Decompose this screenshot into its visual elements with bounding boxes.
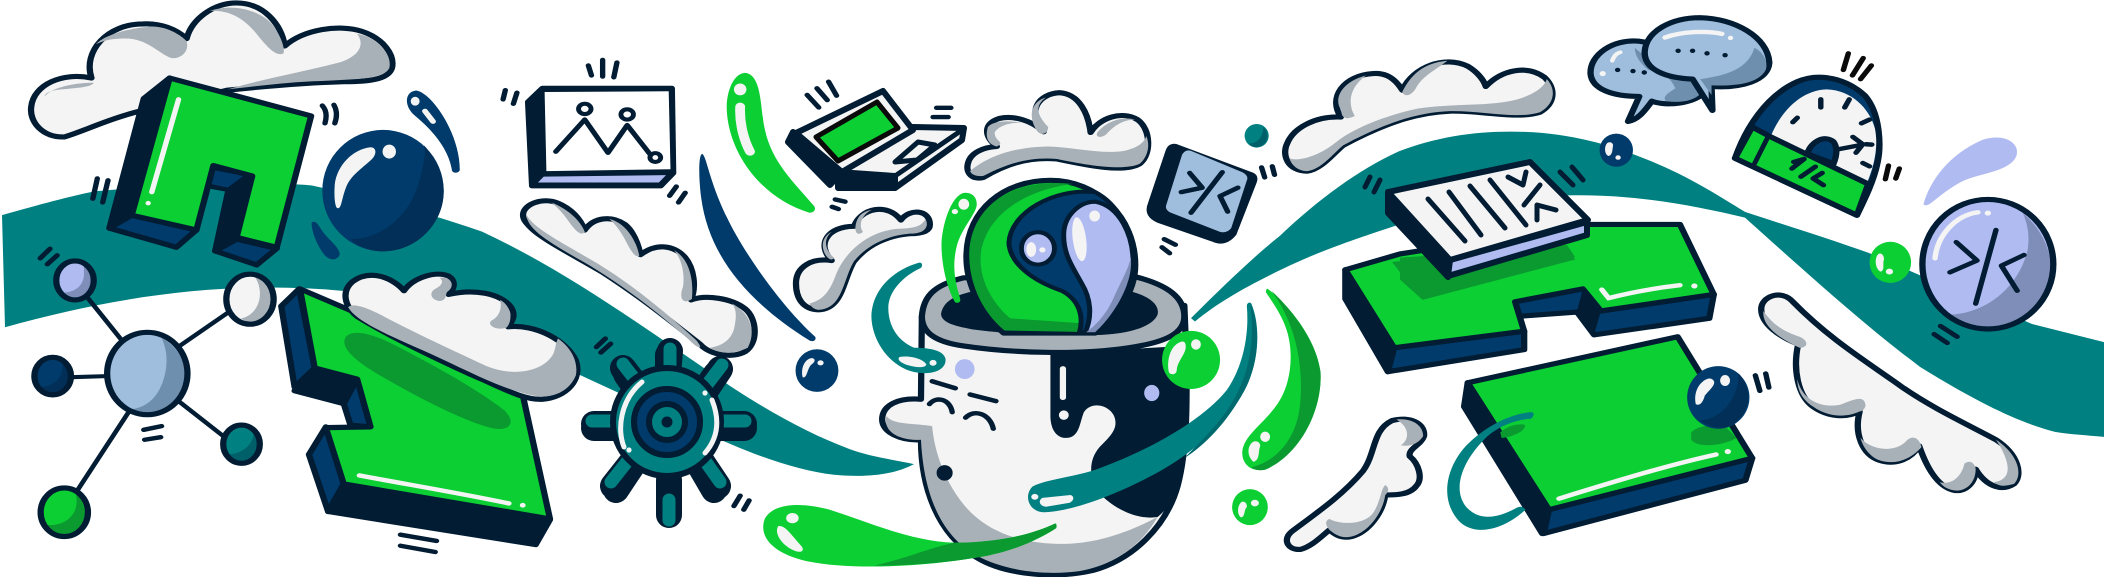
laptop	[788, 91, 964, 188]
cloud: wing lower	[1287, 419, 1424, 549]
motion marks: document	[1365, 167, 1583, 192]
right section	[1285, 18, 2053, 534]
teal swirl	[871, 263, 946, 373]
document card	[1388, 162, 1588, 290]
green block: top left	[109, 78, 311, 265]
teal wave right	[1191, 132, 2104, 437]
motion marks: badge	[1162, 166, 1275, 253]
green block: bottom left	[281, 289, 550, 545]
green ball right	[1162, 331, 1220, 389]
pot shade	[886, 416, 1158, 573]
pot body	[882, 305, 1187, 575]
left section	[31, 3, 755, 552]
teal dot	[1245, 124, 1269, 148]
green block: bottom right	[1464, 337, 1752, 534]
motion marks: block	[93, 105, 336, 202]
gear	[592, 349, 745, 520]
motion marks: chart	[503, 60, 685, 202]
cloud: top right	[1285, 61, 1553, 171]
large navy ball	[322, 130, 444, 251]
comet small	[312, 222, 340, 259]
node lavender	[56, 261, 94, 300]
motion marks: code ball	[1934, 326, 1957, 343]
navy small ball	[796, 349, 838, 392]
code badge	[1150, 146, 1254, 241]
gauge	[1735, 77, 1879, 215]
node teal	[223, 425, 260, 463]
teal ring	[1447, 412, 1534, 530]
network diagram	[34, 249, 274, 537]
face	[929, 381, 996, 429]
bubble back	[1591, 41, 1703, 121]
navy streak	[699, 154, 816, 341]
motion marks: navy ball	[1755, 374, 1769, 391]
motion marks: gear	[596, 339, 611, 353]
navy dot on wave	[1600, 134, 1633, 167]
head pot	[882, 277, 1187, 575]
pot rim	[922, 277, 1184, 352]
yin yang ball	[966, 180, 1135, 333]
teal wave left	[2, 183, 914, 476]
speech bubbles	[1591, 18, 1769, 121]
cloud: top centre	[967, 93, 1148, 178]
teal arm	[1028, 302, 1257, 512]
bubble front	[1645, 18, 1769, 110]
line chart card	[528, 88, 673, 186]
pot dark side	[1050, 346, 1187, 518]
centre section	[699, 73, 1424, 575]
cloud: long thin	[523, 201, 755, 355]
green tail	[941, 193, 977, 303]
navy ball	[1687, 366, 1749, 429]
motion marks: bottom left block	[400, 535, 437, 552]
cloud: small	[796, 209, 930, 310]
node white	[226, 274, 274, 324]
lavender blob	[1924, 137, 2017, 205]
code ball	[1922, 199, 2053, 329]
node navy	[34, 357, 71, 395]
green dot	[1870, 242, 1911, 283]
motion marks: gauge	[1843, 53, 1899, 179]
hub node	[107, 332, 187, 415]
cloud: top left	[31, 3, 392, 137]
green big drop	[763, 505, 1057, 567]
green drop top	[727, 73, 815, 213]
motion marks: laptop	[807, 82, 951, 209]
comet top	[407, 91, 460, 173]
motion marks: gear lower	[734, 496, 749, 510]
node green	[41, 488, 88, 537]
green block: top right	[1345, 224, 1714, 372]
motion marks: network	[40, 249, 162, 440]
cloud: wing right	[1761, 295, 2018, 491]
gear knobs	[592, 349, 745, 520]
green small ball	[1232, 489, 1268, 525]
cloud: on block	[346, 274, 577, 399]
green leaf	[1242, 289, 1321, 470]
